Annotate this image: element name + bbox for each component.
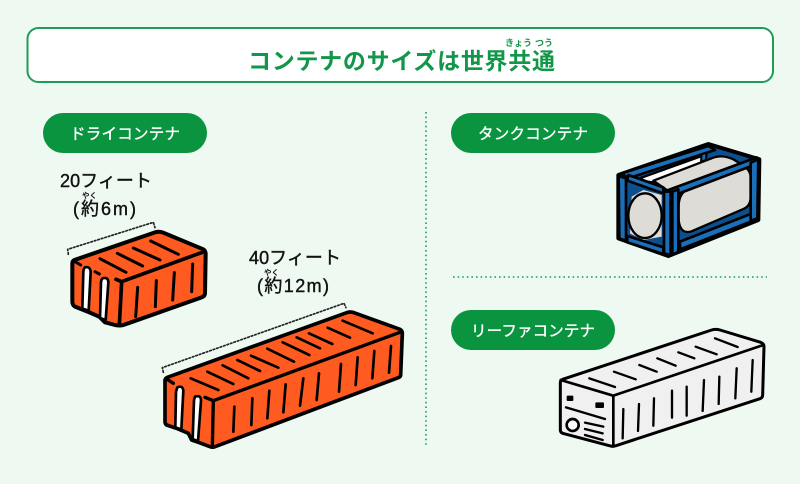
label: 40 feet: (約12m) (257, 276, 329, 296)
heading: tank container (451, 113, 615, 153)
heading: dry container: ドライコンテナ (70, 126, 180, 143)
label: 20 feet: 20フィート (60, 171, 152, 191)
label: 20 feet: (約6m) (73, 199, 136, 219)
label: 40 feet: やく (264, 267, 279, 277)
label: 20 feet (60, 171, 152, 219)
icon: tank container (618, 144, 759, 256)
icon: 20 foot dry container (68, 222, 206, 325)
label: 20 feet: やく (82, 190, 97, 200)
label: 40 feet (249, 248, 341, 296)
title: コンテナのサイズは世界共通 (248, 48, 555, 74)
heading: reefer container: リーファコンテナ (471, 323, 595, 340)
icon: 40 foot dry container (162, 303, 402, 447)
title (28, 28, 773, 82)
title: つう (535, 38, 553, 48)
label: 40 feet: 40フィート (249, 248, 341, 268)
heading: reefer container (451, 310, 615, 350)
heading: tank container: タンクコンテナ (478, 125, 588, 143)
heading: dry container (43, 113, 207, 153)
title: きょう (505, 38, 532, 48)
icon: reefer container (560, 329, 764, 446)
